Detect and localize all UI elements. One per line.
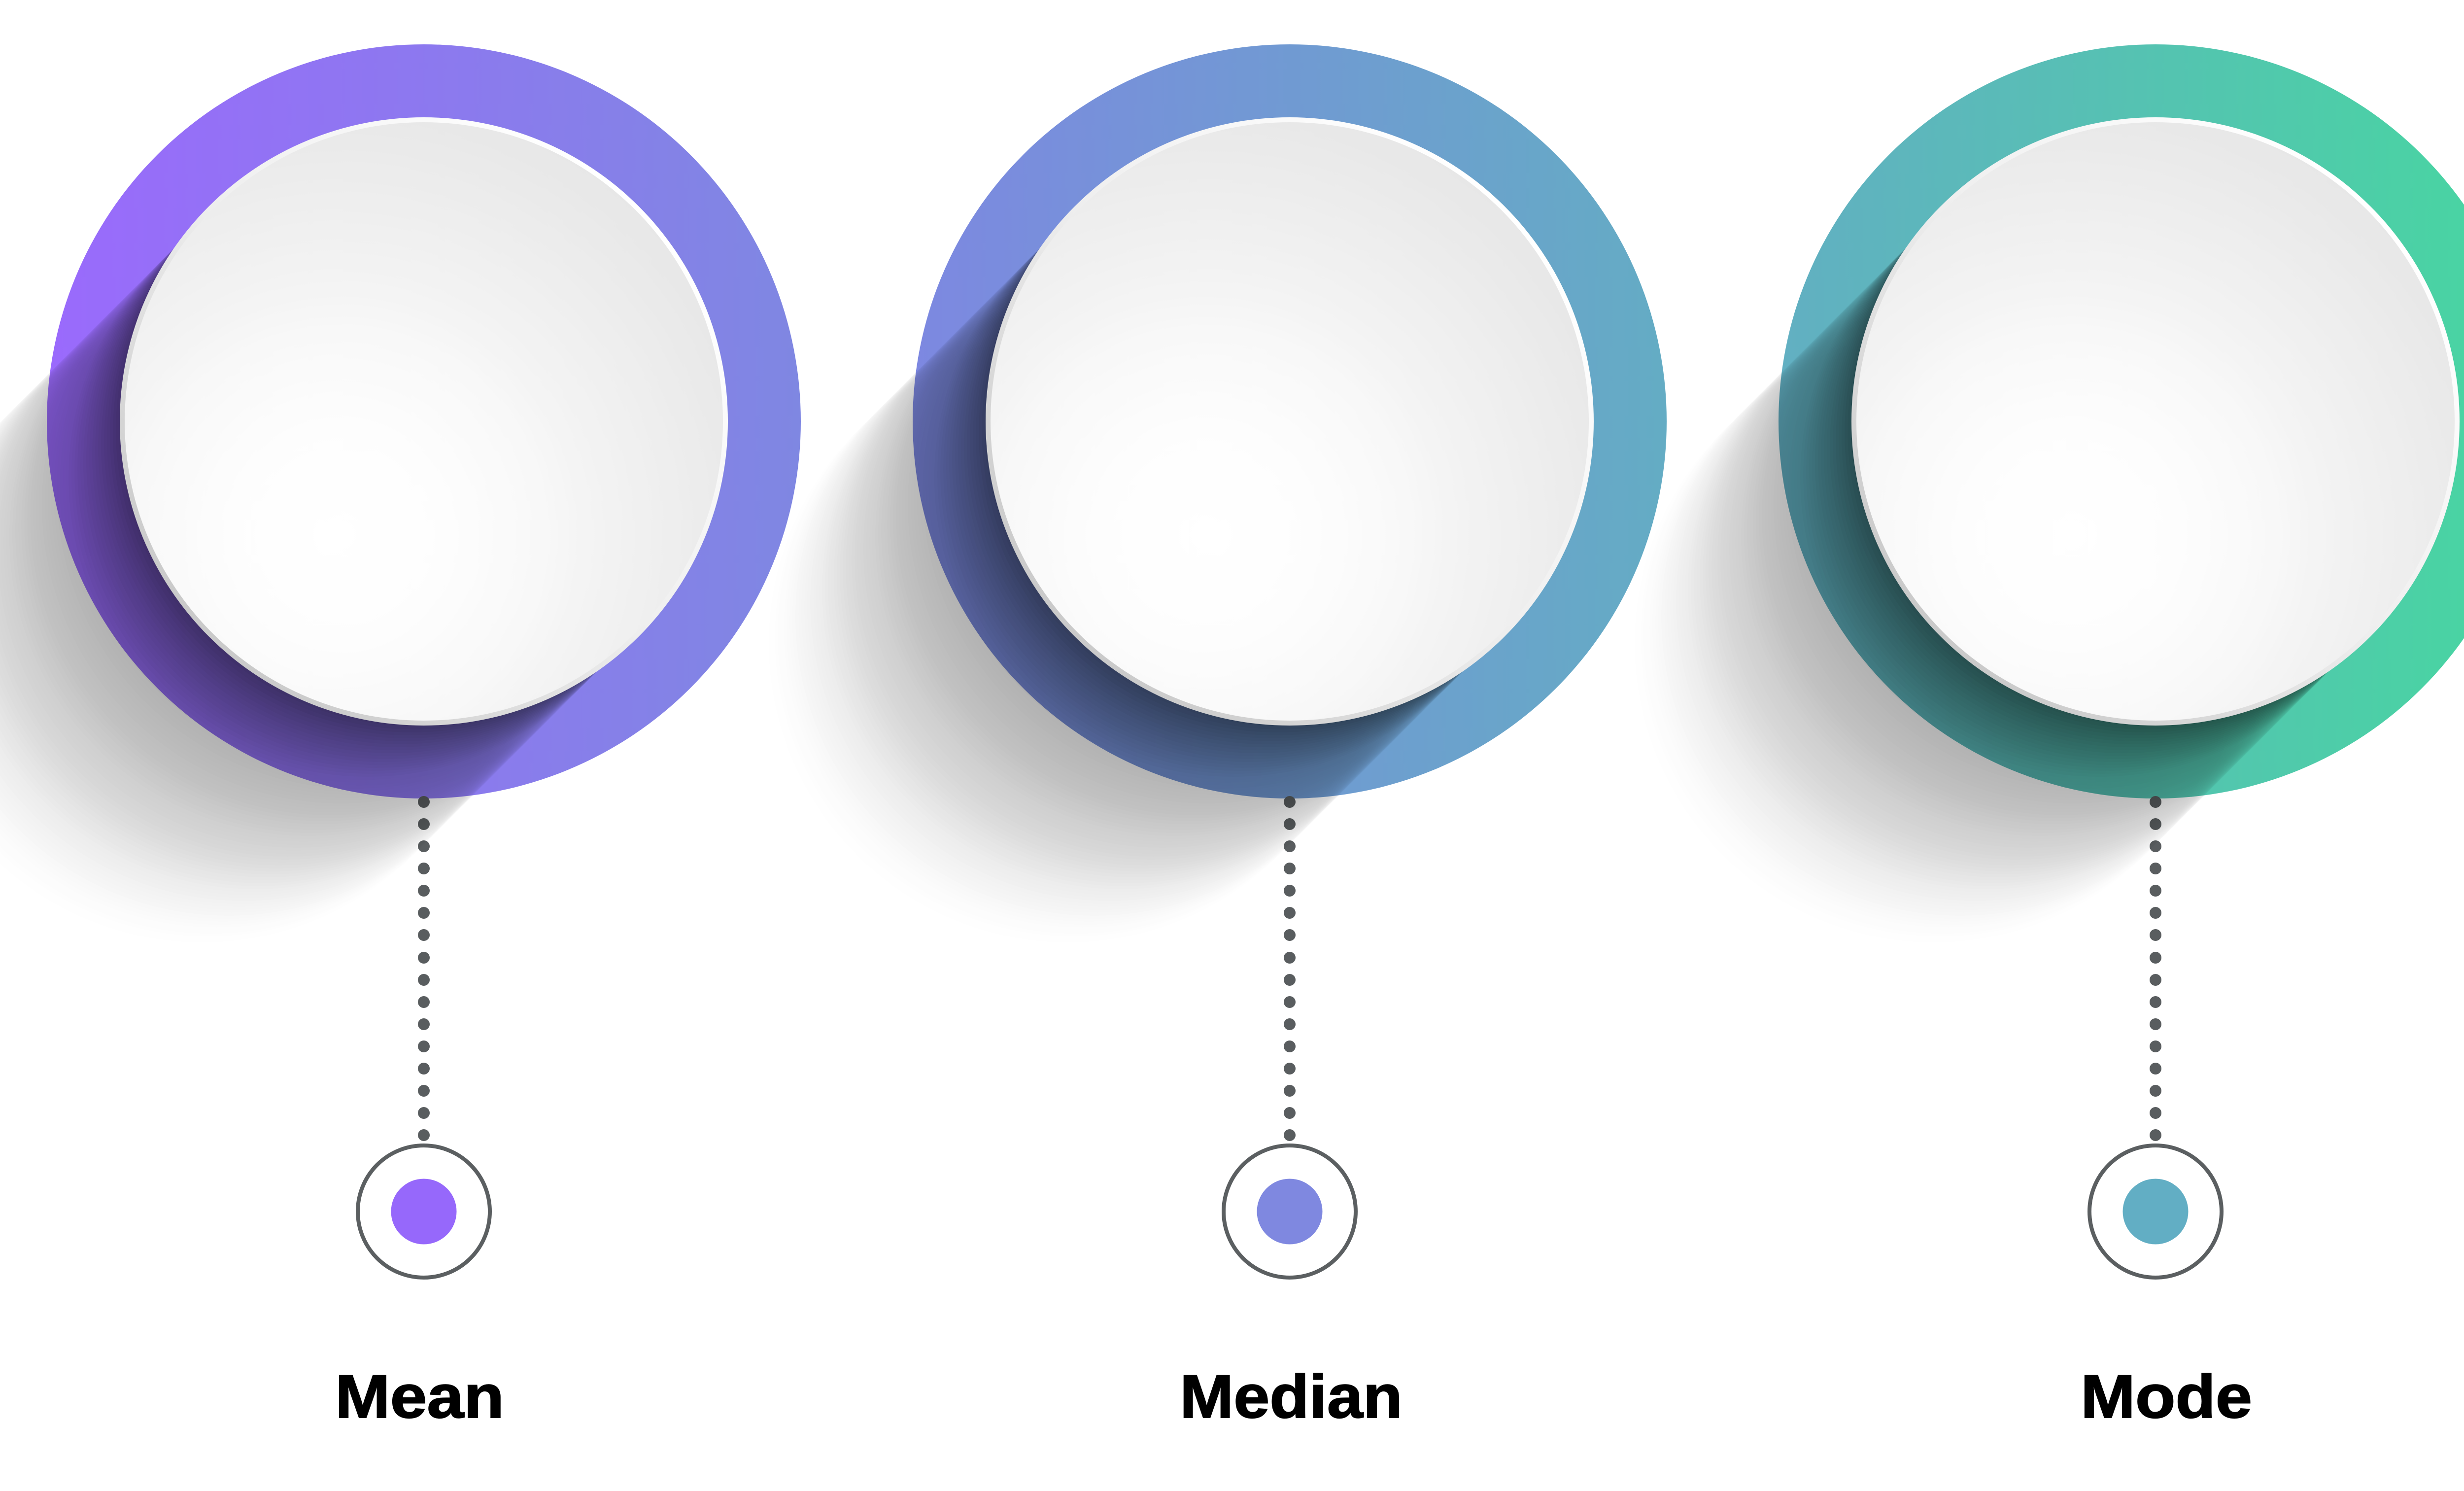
- marker: mode: [2089, 1145, 2222, 1278]
- long shadow: mode: [1635, 125, 2452, 942]
- long shadow: mean: [0, 125, 720, 942]
- panel: mean: [0, 44, 801, 1431]
- panel: mode: [1635, 44, 2464, 1431]
- white disc: mode: [1851, 117, 2460, 726]
- label: mode: Mode: [2081, 1363, 2252, 1431]
- dotted connector: median: [1284, 796, 1296, 1141]
- panel: median: [769, 44, 1667, 1431]
- dotted connector: mean: [418, 796, 430, 1141]
- coloured ring: median: [913, 44, 1667, 798]
- dotted connector: mode: [2150, 796, 2161, 1141]
- coloured ring: mean: [47, 44, 801, 798]
- marker: mean: [358, 1145, 490, 1278]
- white disc: mean: [120, 117, 728, 726]
- label: median: Median: [1180, 1363, 1403, 1431]
- white disc: median: [986, 117, 1594, 726]
- coloured ring: mode: [1779, 44, 2464, 798]
- marker: median: [1224, 1145, 1356, 1278]
- label: mean: Mean: [335, 1363, 504, 1431]
- long shadow: median: [769, 125, 1586, 942]
